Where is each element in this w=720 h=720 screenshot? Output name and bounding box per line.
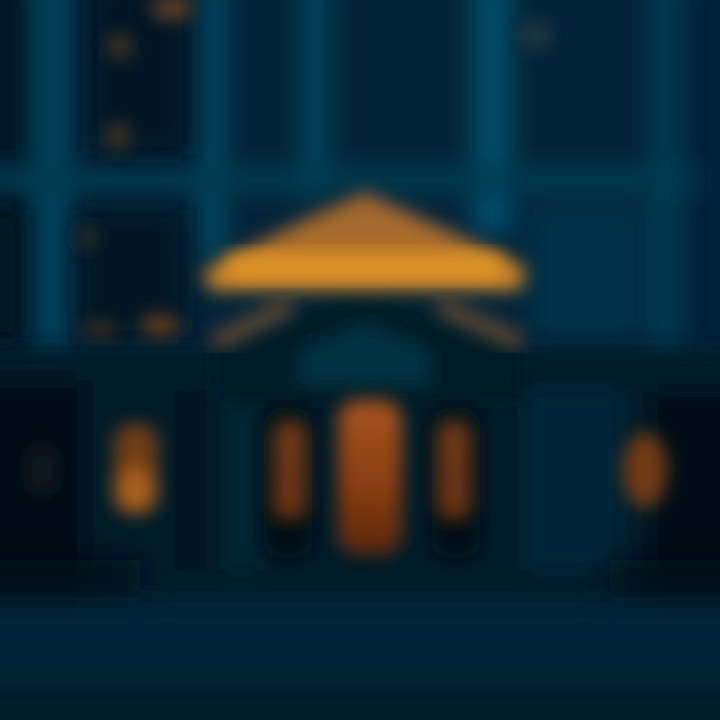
lower building mass: [0, 350, 720, 600]
far left faint window: [30, 444, 54, 496]
portico pediment shadow: [215, 290, 520, 400]
portico windows: [273, 420, 471, 520]
portico dark openings: [264, 408, 480, 558]
small lit tower windows: [78, 0, 549, 340]
right window: [623, 432, 667, 508]
tower facade: vertical and horizontal bands: [0, 0, 720, 350]
golden roof: [202, 192, 527, 290]
dark tower windows: [0, 0, 190, 340]
central door: [338, 400, 402, 555]
forecourt steps: [0, 560, 720, 720]
left window: [114, 424, 158, 514]
pediment edge glow: [220, 308, 515, 340]
roof highlight: [225, 254, 505, 278]
